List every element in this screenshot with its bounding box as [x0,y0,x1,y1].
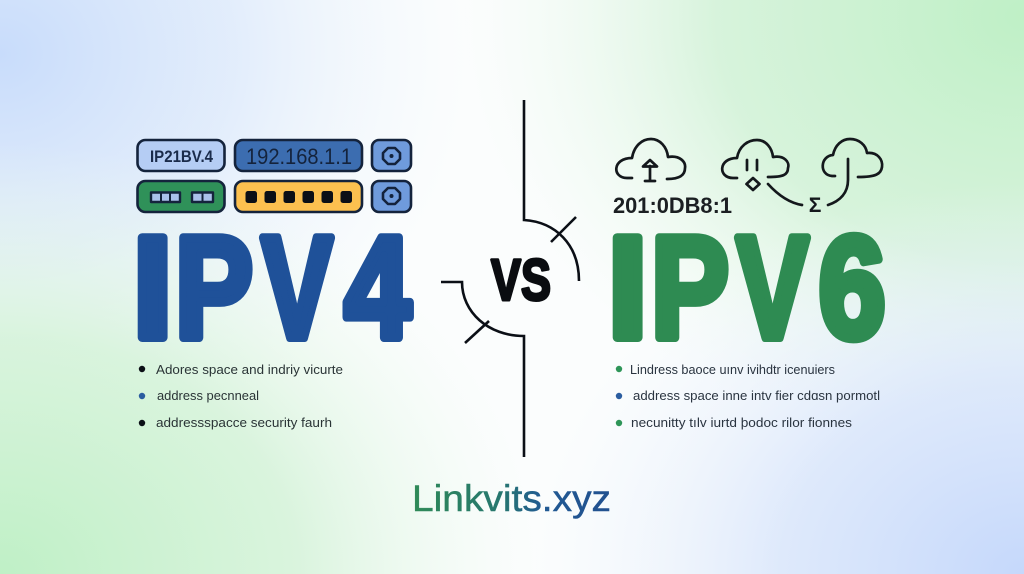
heading: IPV6: I [608,206,648,368]
panel: IPv4 hardware icons [138,140,411,212]
tick bottom [465,321,489,343]
bullet 2: address space inne intv fier cdɑsn pormotl [633,389,880,403]
address box: 192.168.1.1: 192.168.1.1 [246,144,352,169]
heading: IPV4: I [132,206,173,368]
divider top [524,100,579,281]
bullet 3: addressspacce security faurh [156,416,332,430]
IPv6 address label: 201:0DB8:1 [613,193,732,218]
bullet list: IPv4 [139,363,343,430]
icon: cloud with stem [823,139,882,205]
bullet 1: Adores space and indriy vicurte [156,363,343,377]
bullet list: IPv6 [616,363,880,430]
panel: IPv6 cloud icons [616,139,882,205]
orange port box [235,181,362,212]
heading: IPV6 [608,206,886,368]
heading: IPV4: 4 [344,206,411,368]
VS label: VS [491,248,551,313]
heading: IPV6: P [651,206,729,368]
connector curve to sigma [768,184,802,205]
label box: IP21BV.4: IP21BV.4 [150,147,213,166]
brand footer: Linkvits.xyz [412,478,611,519]
heading: IPV4: V [262,206,332,368]
heading: IPV4: P [175,206,253,368]
icon: cloud with marks [722,140,788,190]
icon: cloud upload [616,139,685,181]
label box: IP21BV.4 [138,140,224,171]
icon: gear bottom [372,181,411,212]
icon: gear top [372,140,411,171]
bullet 3: necunitty tılv iurtd þodoc rilor fionnes [631,416,852,430]
bullet 2: address pecnneal [157,389,259,403]
heading: IPV6: V [736,206,808,368]
green switch box [138,181,224,212]
divider bottom [441,282,524,457]
tick top [551,217,576,242]
heading: IPV6: 6 [819,206,886,368]
VS divider with arcs [441,100,579,457]
bullet 1: Lindress baoce uınv ivihdtr icenuiers [630,363,835,377]
sigma symbol: Σ [809,194,821,217]
heading: IPV4 [132,206,411,368]
